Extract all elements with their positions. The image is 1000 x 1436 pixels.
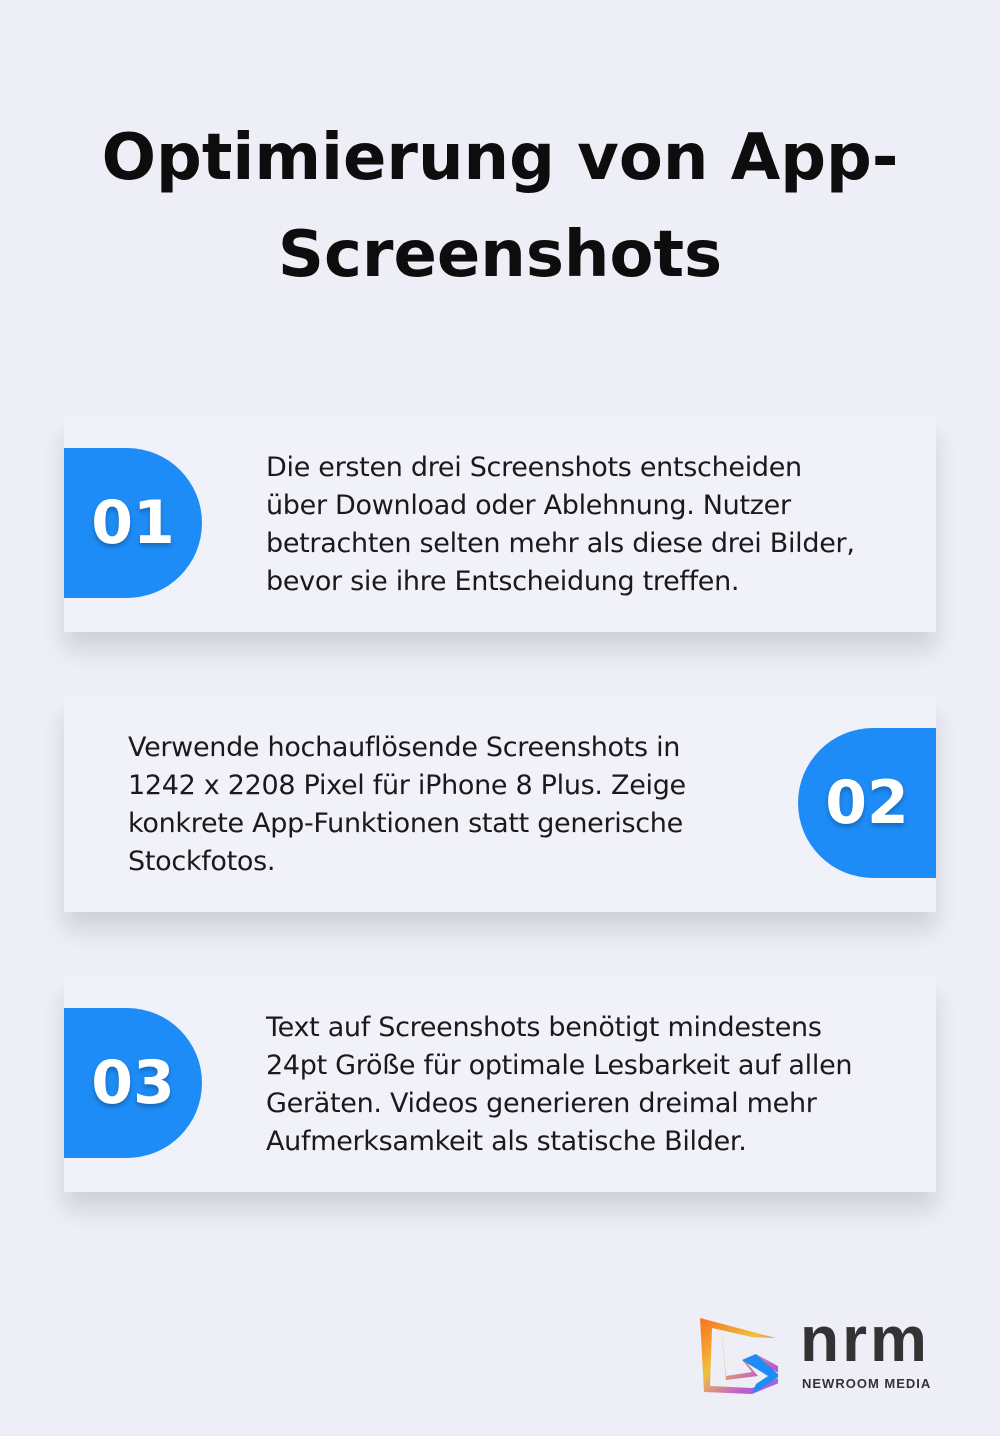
card 3 <box>64 976 936 1192</box>
text 2: Verwende hochauflösende Screenshots in <box>128 732 680 763</box>
text 2 <box>128 732 686 877</box>
badge 03 <box>64 1008 202 1158</box>
logo text: nrm <box>800 1303 930 1375</box>
text 2: Stockfotos. <box>128 846 275 877</box>
text 3 <box>266 1012 852 1157</box>
badge 02: 02 <box>825 768 909 838</box>
text 1: über Download oder Ablehnung. Nutzer <box>266 490 791 521</box>
text 3: Text auf Screenshots benötigt mindestens <box>266 1012 822 1043</box>
text 1 <box>266 452 855 597</box>
logo <box>700 1303 931 1394</box>
title: Screenshots <box>278 218 722 292</box>
badge 01: 01 <box>91 488 175 558</box>
badge 03: 03 <box>91 1048 175 1118</box>
card 2 <box>64 696 936 912</box>
logo: NEWROOM MEDIA <box>802 1376 931 1391</box>
text 1: betrachten selten mehr als diese drei Bilder, <box>266 528 855 559</box>
title: Optimierung von App- <box>102 121 898 195</box>
text 2: konkrete App-Funktionen statt generische <box>128 808 683 839</box>
text 3: Aufmerksamkeit als statische Bilder. <box>266 1126 746 1157</box>
text 1: bevor sie ihre Entscheidung treffen. <box>266 566 739 597</box>
badge 01 <box>64 448 202 598</box>
text 3: Geräten. Videos generieren dreimal mehr <box>266 1088 817 1119</box>
badge 02 <box>798 728 936 878</box>
icon: logo mark <box>700 1318 778 1394</box>
title <box>102 121 898 292</box>
text 2: 1242 x 2208 Pixel für iPhone 8 Plus. Zeige <box>128 770 686 801</box>
text 3: 24pt Größe für optimale Lesbarkeit auf allen <box>266 1050 852 1081</box>
text 1: Die ersten drei Screenshots entscheiden <box>266 452 802 483</box>
card 1 <box>64 416 936 632</box>
